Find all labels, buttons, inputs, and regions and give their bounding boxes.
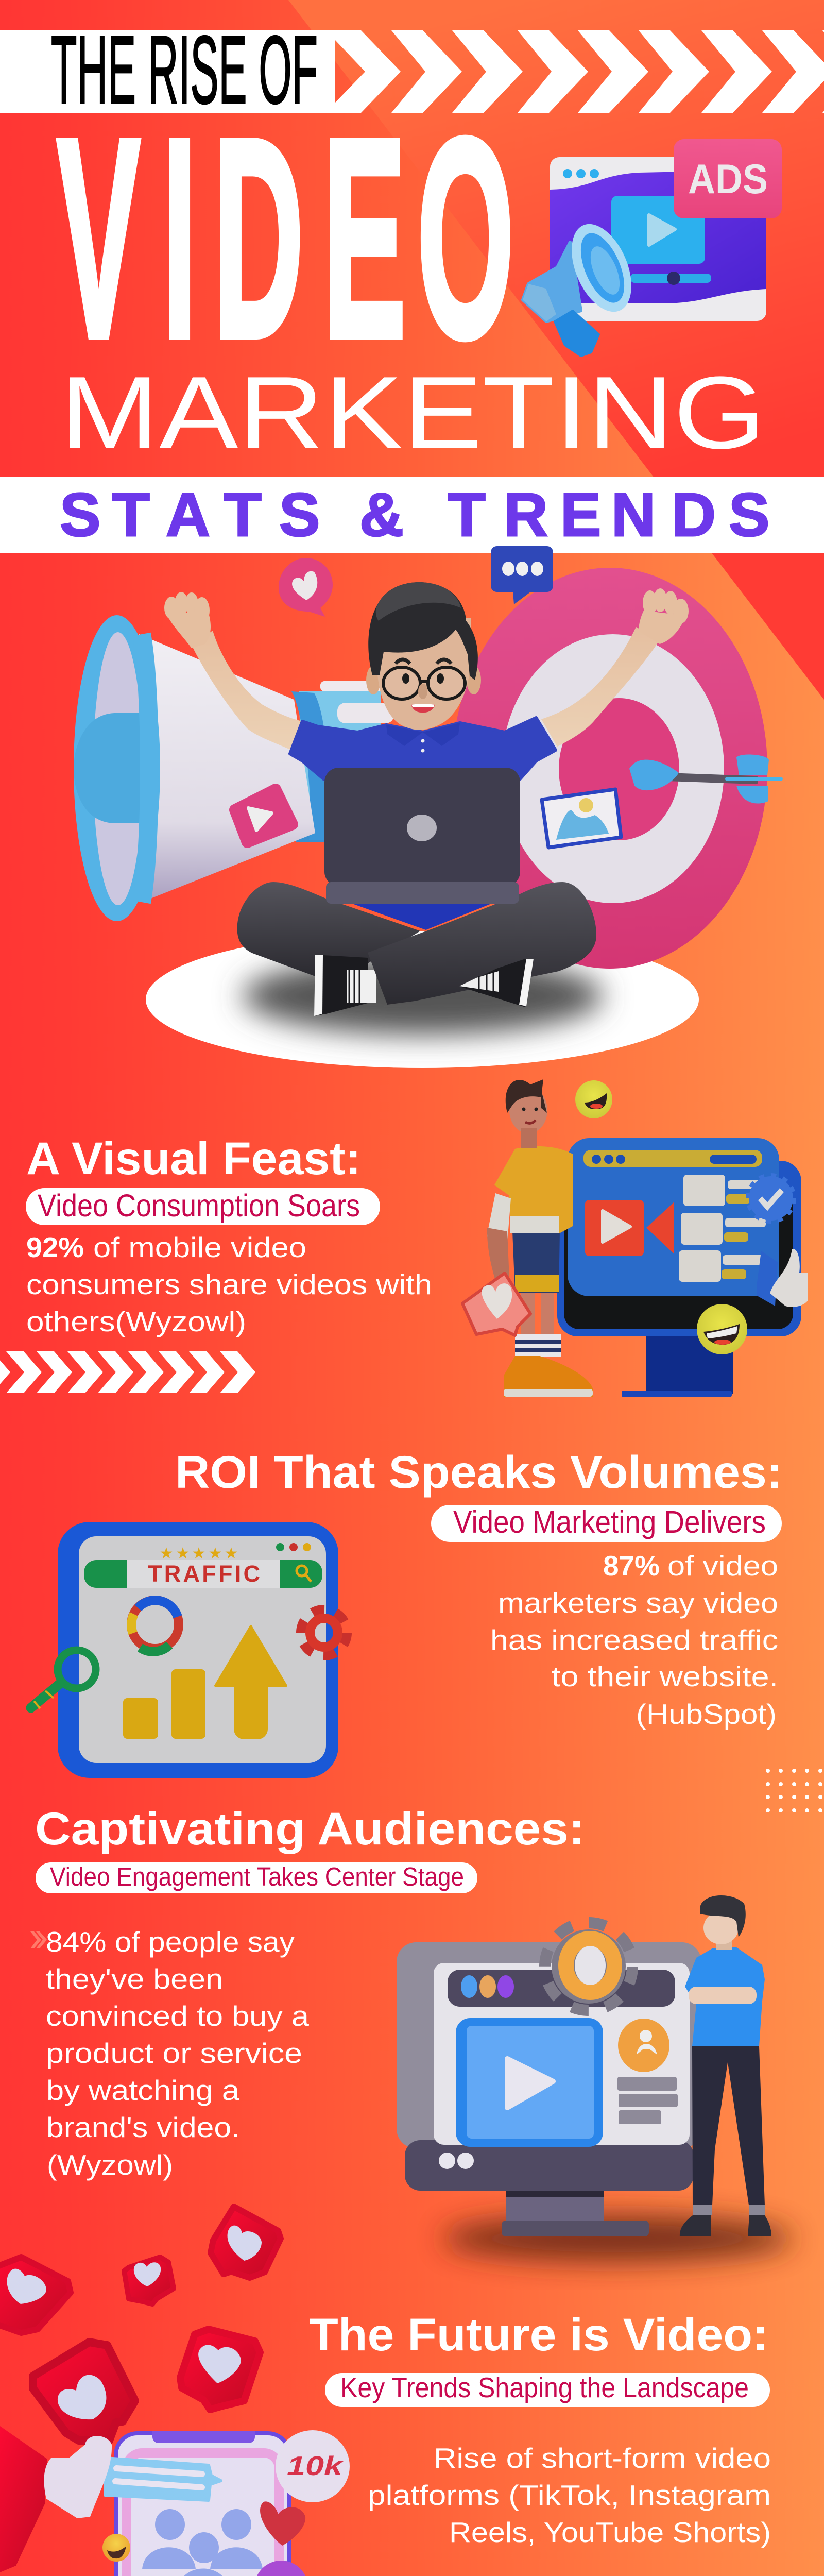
icon: message bubble top	[105, 2458, 221, 2500]
panel: roi that speaks volumes	[31, 1446, 783, 1778]
search bar	[84, 1560, 322, 1588]
body text: Rise of short-form video	[434, 2442, 771, 2474]
heading: Captivating Audiences:	[35, 1803, 585, 1854]
ground shadow	[442, 2215, 793, 2262]
illustration: settings monitor with man	[397, 1895, 793, 2262]
body text: of video	[667, 1550, 778, 1582]
background diagonal shape	[288, 0, 824, 700]
right shoe	[459, 959, 534, 1007]
character: man	[487, 1079, 593, 1397]
panel: captivating audiences	[30, 1803, 793, 2262]
body text: Reels, YouTube Shorts)	[449, 2516, 771, 2548]
body text: consumers share videos with	[26, 1268, 432, 1300]
target	[452, 568, 767, 969]
icon: header chevrons	[335, 30, 824, 113]
phone	[116, 2433, 289, 2576]
heading: The Future is Video:	[309, 2309, 768, 2360]
search bar: TRAFFIC	[148, 1561, 260, 1587]
body text: of mobile video	[93, 1231, 306, 1263]
body text: product or service	[46, 2037, 302, 2069]
glasses	[383, 667, 465, 699]
body text: has increased traffic	[490, 1624, 778, 1656]
panel: a visual feast	[0, 1079, 808, 1397]
body text: they've been	[46, 1963, 223, 1995]
left shoe	[314, 955, 376, 1016]
icon: heart	[260, 2501, 305, 2546]
donut chart	[131, 1600, 179, 1652]
text lines	[617, 2077, 678, 2124]
heading: A Visual Feast:	[26, 1132, 361, 1184]
body text: platforms (TikTok, Instagram	[368, 2479, 771, 2511]
body text: (Wyzowl)	[47, 2149, 173, 2181]
subheading pill: Video Engagement Takes Center Stage	[50, 1862, 464, 1891]
subheading pill: Video Consumption Soars	[38, 1188, 360, 1223]
monitor back	[557, 1161, 801, 1336]
icon: check badge	[748, 1176, 794, 1221]
floor ellipse	[146, 931, 699, 1068]
left fist	[164, 592, 211, 648]
icon: 10k badge: 10k	[287, 2451, 345, 2481]
icon: heart bubble	[279, 558, 333, 617]
laptop	[324, 768, 520, 904]
heart bubble 3	[0, 2257, 71, 2333]
icons: floating heart bubbles	[0, 2207, 281, 2574]
heading: ROI That Speaks Volumes:	[175, 1446, 783, 1498]
rating stars: ★	[160, 1545, 173, 1562]
panel: title	[0, 16, 824, 470]
profile coin	[618, 2019, 670, 2072]
heart bubble 2	[124, 2257, 174, 2304]
icon: chat dots	[254, 2561, 308, 2576]
title: video: VIDEO	[57, 80, 514, 396]
panel: the future is video	[309, 2309, 771, 2576]
icon: thumbs up	[44, 2436, 112, 2518]
right leg	[368, 882, 596, 1005]
rating stars: ★	[209, 1545, 222, 1562]
panel: title: THE RISE OF	[51, 16, 318, 124]
body text: brand's video.	[46, 2111, 240, 2143]
title band: the rise of	[0, 16, 335, 124]
hair	[368, 582, 478, 680]
bars and arrow	[123, 1626, 286, 1739]
illustration: man with video monitor	[462, 1079, 808, 1397]
title: marketing: MARKETING	[60, 355, 766, 470]
video tile	[456, 2018, 603, 2147]
monitor stand	[646, 1336, 733, 1394]
window dots	[276, 1543, 311, 1551]
illustration: ads browser and megaphone	[523, 139, 782, 356]
illustration: ads browser and megaphone: ADS	[688, 156, 768, 202]
body text: marketers say video	[498, 1587, 778, 1619]
monitor dots	[439, 2153, 455, 2169]
body text	[26, 1231, 432, 1337]
head	[366, 666, 381, 694]
subtitle band: stats and trends: STATS & TRENDS	[60, 481, 769, 549]
body text	[357, 2442, 771, 2576]
icon: emoji top	[575, 1080, 612, 1118]
megaphone	[74, 615, 394, 921]
heart bubble 5	[180, 2329, 260, 2410]
rating stars	[160, 1545, 238, 1562]
face details	[402, 673, 409, 684]
heart bubble 4	[33, 2342, 135, 2441]
icon: magnifier	[31, 1650, 96, 1708]
icon: picture card	[542, 789, 621, 848]
arms	[192, 631, 302, 750]
body text: others(Wyzowl)	[26, 1306, 246, 1337]
heart bubble 1	[211, 2207, 281, 2278]
right fist	[639, 588, 689, 644]
body text: 87%	[603, 1550, 660, 1582]
icon: 10k badge	[276, 2430, 350, 2502]
lower shirt	[352, 904, 491, 930]
character: man with crossed arms	[680, 1895, 771, 2236]
icon: emoji bottom	[697, 1304, 747, 1354]
monitor body	[397, 1942, 701, 2148]
floor shadow	[243, 957, 603, 1035]
body text: convinced to buy a	[46, 2000, 309, 2032]
icon: gear	[545, 1923, 632, 2010]
body text: 84% of people say	[46, 1926, 295, 1958]
body text: to their website.	[552, 1660, 778, 1692]
body text	[490, 1550, 778, 1730]
monitor screen	[568, 1138, 779, 1296]
illustration: traffic browser	[31, 1522, 347, 1778]
icons: laughing emojis	[89, 2534, 158, 2576]
icon: heart bubble	[462, 1273, 530, 1335]
icon: small chevrons	[30, 1931, 47, 1948]
subheading pill: Video Marketing Delivers	[453, 1504, 766, 1539]
rating stars: ★	[225, 1545, 238, 1562]
icon: thumbs up	[757, 1249, 808, 1307]
character: man with laptop	[164, 582, 689, 1016]
shirt	[290, 718, 556, 779]
monitor stand	[506, 2187, 604, 2223]
icon: chevrons	[0, 1351, 255, 1393]
icon: gear	[301, 1610, 347, 1655]
decorative dot grid	[766, 1769, 822, 1812]
left leg	[237, 882, 420, 976]
icon: play badge	[235, 789, 293, 842]
rating stars: ★	[192, 1545, 205, 1562]
rating stars: ★	[176, 1545, 190, 1562]
body text: by watching a	[46, 2074, 239, 2106]
heart bubble 6	[0, 2422, 47, 2574]
body text	[46, 1926, 309, 2181]
icon: chat bubble	[491, 546, 553, 604]
illustration: phone with social icons	[43, 2430, 350, 2576]
body text: 92%	[26, 1231, 84, 1263]
hero illustration	[74, 546, 783, 1068]
people icons	[142, 2509, 263, 2576]
body text: (HubSpot)	[636, 1698, 777, 1730]
dart	[629, 755, 783, 804]
subheading pill: Key Trends Shaping the Landscape	[340, 2371, 749, 2403]
